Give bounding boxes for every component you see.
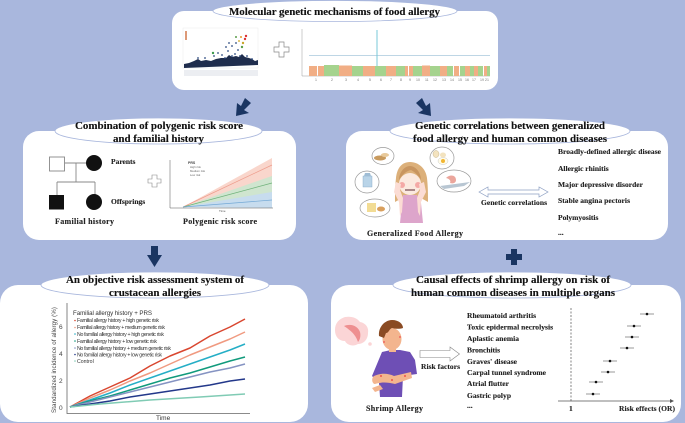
manhattan plot xyxy=(302,29,490,82)
incidence line chart: 6 xyxy=(59,324,63,331)
manhattan plot: 14 xyxy=(450,78,454,82)
list: diseases: Toxic epidermal necrolysis xyxy=(467,322,553,332)
manhattan plot: 1 xyxy=(315,78,317,82)
label: generalized food allergy: Generalized Food Allergy xyxy=(367,229,463,238)
icon: plus xyxy=(148,175,161,187)
PRS line chart: Low risk xyxy=(190,173,201,177)
regional association plot xyxy=(183,28,258,76)
manhattan plot: 15 xyxy=(458,78,462,82)
heading: causal effects: Causal effects of shrimp allergy on risk of xyxy=(416,274,610,286)
heading: risk assessment: An objective risk assessment system of xyxy=(66,274,244,286)
arrow: down to risk assessment xyxy=(147,246,162,267)
PRS line chart xyxy=(170,158,273,226)
panel: causal effects of shrimp allergy xyxy=(331,272,681,422)
list: diseases: Bronchitis xyxy=(467,346,500,354)
heading: causal effects: human common diseases in multiple organs xyxy=(411,287,616,299)
heading: genetic correlations: food allergy and human common diseases xyxy=(413,133,608,145)
list: diseases: Rheumatoid arthritis xyxy=(467,311,536,320)
manhattan plot: 3 xyxy=(345,78,347,82)
icon: milk in bubble xyxy=(355,171,379,193)
arrow: down-right to correlations panel xyxy=(416,98,431,116)
heading: causal effects xyxy=(393,272,631,299)
manhattan plot: 19 xyxy=(480,78,484,82)
icon: eggs in bubble xyxy=(430,147,454,169)
arrow: down-left to polygenic panel xyxy=(236,98,251,116)
illustration: man with shrimp allergy xyxy=(372,320,417,397)
incidence line chart: Familial allergy history + low genetic risk xyxy=(77,339,157,345)
PRS line chart: PRS xyxy=(188,161,196,165)
icon: plus xyxy=(274,42,289,57)
incidence line chart: Familial allergy history + high genetic risk xyxy=(77,318,159,324)
arrow: risk factors xyxy=(420,347,460,361)
manhattan plot: 8 xyxy=(400,78,402,82)
pedigree chart: Offsprings xyxy=(111,197,145,206)
pedigree chart: Familial history xyxy=(55,217,114,226)
manhattan plot: 9 xyxy=(409,78,411,82)
list: correlated diseases: Allergic rhinitis xyxy=(558,164,609,173)
panel: molecular genetic mechanisms xyxy=(172,0,498,90)
list: correlated diseases: Stable angina pectoris xyxy=(558,196,630,205)
icon: cheese and bread in bubble xyxy=(360,199,390,217)
heading: molecular genetic mechanisms: Molecular genetic mechanisms of food allergy xyxy=(229,6,440,18)
list: correlated diseases xyxy=(558,147,662,237)
manhattan plot: 6 xyxy=(380,78,382,82)
list: diseases: Carpal tunnel syndrome xyxy=(467,368,547,377)
list: diseases: Gastric polyp xyxy=(467,391,511,400)
heading: molecular genetic mechanisms xyxy=(213,0,457,22)
forest plot: 1 xyxy=(569,404,573,413)
PRS line chart: High risk xyxy=(190,165,201,169)
pedigree chart xyxy=(49,155,145,226)
list: correlated diseases: Broadly-defined allergic disease xyxy=(558,147,662,156)
list: diseases: Aplastic anemia xyxy=(467,334,519,343)
incidence line chart: No familial allergy history + medium genetic risk xyxy=(77,346,171,352)
label: shrimp allergy: Shrimp Allergy xyxy=(366,404,423,413)
manhattan plot: 4 xyxy=(357,78,359,82)
heading: combination of PRS and familial history: and familial history xyxy=(113,133,204,145)
incidence line chart: 2 xyxy=(59,378,63,385)
list: diseases: Graves' disease xyxy=(467,357,518,366)
PRS line chart: Time xyxy=(219,209,226,213)
icon: shrimp thought bubble xyxy=(335,317,372,346)
panel: risk assessment system xyxy=(0,272,308,422)
icon: navy plus xyxy=(506,249,522,265)
manhattan plot: 12 xyxy=(433,78,437,82)
incidence line chart xyxy=(51,303,250,422)
label: genetic correlations: Genetic correlations xyxy=(481,198,547,207)
panel: polygenic risk and familial history xyxy=(23,118,296,240)
manhattan plot: 17 xyxy=(472,78,476,82)
list: diseases xyxy=(467,311,553,410)
manhattan plot: 2 xyxy=(331,78,333,82)
incidence line chart: Familial allergy history + PRS xyxy=(73,310,152,317)
PRS line chart: Polygenic risk score xyxy=(183,217,257,226)
manhattan plot: 10 xyxy=(416,78,420,82)
forest plot: Risk effects (OR) xyxy=(619,404,676,413)
icon: bread in bubble xyxy=(372,148,394,164)
list: diseases: Atrial flutter xyxy=(467,379,510,388)
manhattan plot: 21 xyxy=(485,78,489,82)
incidence line chart: No familial allergy history + high genetic risk xyxy=(77,332,164,338)
heading: risk assessment xyxy=(41,272,269,299)
manhattan plot: 11 xyxy=(425,78,429,82)
list: correlated diseases: ... xyxy=(558,228,564,237)
heading: genetic correlations xyxy=(390,118,630,145)
panel: genetic correlations xyxy=(346,118,668,240)
incidence line chart: 0 xyxy=(59,405,63,412)
heading: risk assessment: crustacean allergies xyxy=(109,287,202,299)
incidence line chart: No familial allergy history + low genetic risk xyxy=(77,352,162,358)
pedigree chart: Parents xyxy=(111,157,136,166)
double arrow xyxy=(479,187,548,197)
forest plot xyxy=(558,308,676,413)
heading: combination of PRS and familial history: Combination of polygenic risk score xyxy=(75,120,243,132)
illustration: girl with food allergy xyxy=(394,162,428,223)
list: correlated diseases: Major depressive disorder xyxy=(558,180,644,189)
incidence line chart: Standardized incidence of allergy (%) xyxy=(51,307,58,413)
manhattan plot: 13 xyxy=(442,78,446,82)
incidence line chart: Familial allergy history + medium genetic risk xyxy=(77,325,165,331)
heading: genetic correlations: Genetic correlations between generalized xyxy=(415,120,605,132)
heading: combination of PRS and familial history xyxy=(55,118,262,145)
icon: shrimp in bubble xyxy=(437,170,471,192)
PRS line chart: Medium risk xyxy=(190,169,206,173)
incidence line chart: Control xyxy=(77,359,94,365)
label: risk factors: Risk factors xyxy=(421,362,460,371)
list: diseases: ... xyxy=(467,401,473,410)
list: correlated diseases: Polymyositis xyxy=(558,213,598,222)
incidence line chart: 4 xyxy=(59,351,63,358)
manhattan plot: 16 xyxy=(465,78,469,82)
incidence line chart: Time xyxy=(156,415,171,422)
manhattan plot: 5 xyxy=(369,78,371,82)
manhattan plot: 7 xyxy=(390,78,392,82)
